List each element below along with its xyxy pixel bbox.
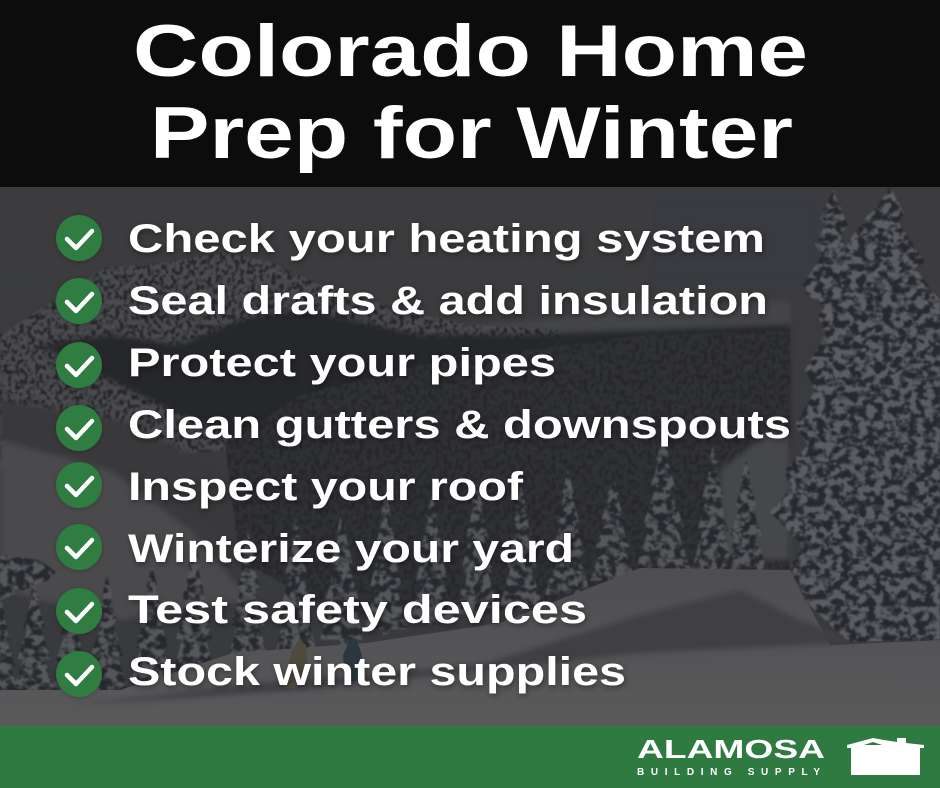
logo wordmark: BUILDING SUPPLY bbox=[637, 767, 820, 778]
photo background: snowy mountain forest bbox=[0, 187, 940, 727]
item: pipes: Protect your pipes bbox=[128, 341, 556, 385]
item: roof bbox=[56, 462, 524, 509]
snow patch among trees bbox=[720, 432, 790, 560]
footer band bbox=[0, 726, 940, 788]
logo wordmark: ALAMOSA bbox=[637, 734, 825, 764]
icon: house logo bbox=[847, 738, 924, 775]
mid forest bbox=[225, 330, 790, 620]
item: heating: Check your heating system bbox=[128, 217, 765, 261]
item: yard bbox=[56, 524, 574, 571]
skiers bbox=[282, 638, 362, 688]
large foreground tree bbox=[770, 187, 940, 642]
forest trees bbox=[0, 435, 767, 700]
header band bbox=[0, 0, 940, 187]
item: gutters: Clean gutters & downspouts bbox=[128, 403, 791, 447]
left snowy slope bbox=[0, 440, 250, 620]
logo wordmark bbox=[637, 734, 825, 778]
item: supplies bbox=[56, 650, 626, 697]
item: safety bbox=[56, 588, 587, 634]
item: yard: Winterize your yard bbox=[128, 527, 574, 571]
distant right ridge bbox=[440, 300, 790, 360]
item: safety: Test safety devices bbox=[128, 588, 587, 632]
item: drafts: Seal drafts & add insulation bbox=[128, 279, 768, 323]
title: Colorado Home bbox=[133, 11, 808, 92]
title: Prep for Winter bbox=[150, 93, 793, 174]
item: roof: Inspect your roof bbox=[128, 465, 524, 509]
mountain ridge bbox=[0, 252, 560, 470]
snow foreground bbox=[0, 568, 940, 727]
item: gutters bbox=[56, 403, 791, 451]
dark mountain shoulder bbox=[40, 310, 790, 470]
slope shadow bbox=[75, 590, 860, 705]
checklist bbox=[56, 215, 791, 697]
item: pipes bbox=[56, 341, 556, 388]
bluish sky patch bbox=[650, 195, 820, 285]
title bbox=[133, 11, 808, 174]
item: supplies: Stock winter supplies bbox=[128, 650, 626, 694]
